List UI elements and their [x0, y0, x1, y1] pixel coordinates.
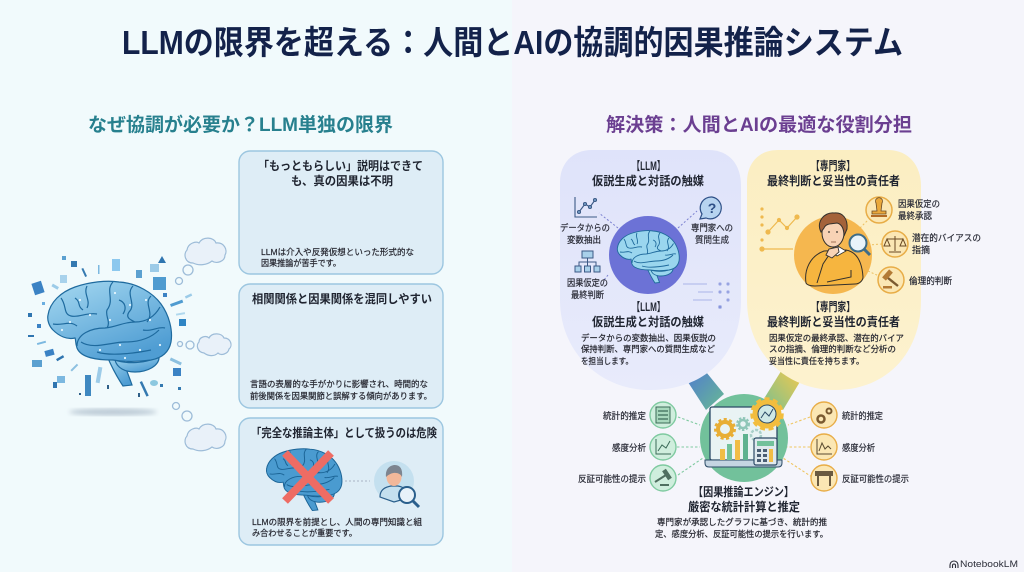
- card: correlation vs causation: [239, 284, 443, 408]
- laptop: [705, 407, 782, 467]
- icon: chart green: [650, 434, 676, 460]
- subheading line 2: 仮説生成と対話の触媒: [592, 315, 704, 329]
- icon: barrier yellow: [811, 465, 837, 491]
- label: sensitivity right: 感度分析: [842, 442, 875, 453]
- label: sensitivity left: 感度分析: [612, 442, 646, 453]
- connector dashes: [860, 220, 882, 276]
- label: falsifiability left: 反証可能性の提示: [578, 473, 646, 484]
- card body line 2: 因果推論が苦手です。: [261, 257, 341, 268]
- label: latent bias: 潜在的バイアスの: [912, 232, 981, 243]
- engine illustration: [700, 394, 788, 482]
- icon: calculator green: [650, 402, 676, 428]
- label: final approval: 因果仮定の: [898, 198, 940, 209]
- calculator: [754, 438, 777, 465]
- subheading: 【専門家】: [811, 300, 855, 314]
- dashed connectors: engine left: [677, 417, 703, 475]
- icon: person with magnifier: [374, 461, 419, 507]
- label: expert questions: 専門家への: [691, 222, 733, 233]
- card: dangerous as complete agent: [239, 418, 443, 545]
- icon: brain in circle: [609, 216, 687, 294]
- engine heading: 【因果推論エンジン】: [693, 485, 794, 499]
- thought clouds: [172, 238, 231, 451]
- decorative chart: [760, 208, 799, 251]
- thought bubbles: [172, 265, 194, 421]
- icon: expert person: [794, 213, 872, 294]
- data fragments: [28, 256, 192, 397]
- icon: scales: [882, 231, 908, 257]
- label line 2: 指摘: [912, 244, 930, 255]
- panel heading line 2: 仮説生成と対話の触媒: [592, 174, 704, 188]
- label line 2: 変数抽出: [567, 234, 601, 245]
- dotted arrows: [599, 211, 697, 280]
- card title: 相関関係と因果関係を混同しやすい: [252, 292, 432, 306]
- label: falsifiability right: 反証可能性の提示: [842, 473, 909, 484]
- icon: crossed brain: [266, 449, 342, 511]
- body line 2: スの指摘、倫理的判断など分析の: [769, 343, 896, 354]
- body: 因果仮定の最終承認、潜在的バイア: [769, 332, 904, 343]
- dashed connectors: engine right: [783, 417, 812, 477]
- card body: LLMの限界を前提とし、人間の専門知識と組: [252, 516, 422, 527]
- heading: right column: 解決策：人間とAIの最適な役割分担: [606, 113, 912, 136]
- engine body: 専門家が承認したグラフに基づき、統計的推: [657, 516, 827, 527]
- body line 3: 妥当性に責任を持ちます。: [769, 355, 864, 366]
- connector band: expert to engine: [765, 368, 801, 410]
- label line 2: 最終承認: [898, 210, 932, 221]
- dashed connector: [345, 480, 370, 482]
- cloud 1: [185, 238, 226, 265]
- body line 2: 保持判断、専門家への質問生成など: [581, 343, 715, 354]
- label line 2: 質問生成: [695, 234, 729, 245]
- card body: 言語の表層的な手がかりに影響され、時間的な: [250, 378, 428, 389]
- label: variable extraction: データからの: [560, 222, 610, 233]
- logo: NotebookLM: NotebookLM: [960, 559, 1018, 570]
- panel: LLM: [560, 150, 741, 390]
- connector band: LLM to engine: [686, 367, 724, 410]
- large gear: [752, 399, 782, 429]
- label: ethical judgement: 倫理的判断: [909, 275, 952, 286]
- brain: [48, 281, 172, 386]
- illustration: brain with fragments: [28, 256, 192, 416]
- decorative data lines: [683, 283, 729, 308]
- icon: gavel: [878, 267, 904, 293]
- background right: [512, 0, 1024, 572]
- gears: [716, 418, 761, 440]
- body line 3: を担当します。: [581, 355, 633, 366]
- label line 2: 最終判断: [571, 289, 604, 300]
- panel heading: 【LLM】: [632, 159, 665, 173]
- label: statistical estimation right: 統計的推定: [842, 410, 883, 421]
- cloud 3: [185, 424, 226, 451]
- body: データからの変数抽出、因果仮説の: [581, 332, 716, 343]
- card title: 「完全な推論主体」として扱うのは危険: [251, 426, 437, 440]
- card body line 2: 前後関係を因果関節と誤解する傾向があります。: [250, 390, 432, 401]
- brain shadow: [69, 408, 157, 416]
- subheading: 【LLM】: [632, 300, 665, 314]
- card title line 2: も、真の因果は不明: [291, 174, 393, 188]
- icon: question bubble: ?: [708, 200, 716, 216]
- card title: 「もっともらしい」説明はできて: [258, 159, 423, 173]
- panel heading line 2: 最終判断と妥当性の責任者: [767, 174, 900, 188]
- icon: gears yellow: [811, 402, 837, 428]
- card: plausible explanation: [239, 151, 443, 274]
- brain nodes: [61, 292, 161, 359]
- icon: hierarchy: [575, 251, 600, 272]
- icon: question bubble: [700, 197, 721, 219]
- title: LLMの限界を超える：人間とAIの協調的因果推論システム: [122, 24, 903, 61]
- engine body line 2: 定、感度分析、反証可能性の提示を行います。: [655, 528, 828, 539]
- card body: LLMは介入や反発仮想といった形式的な: [261, 246, 414, 257]
- icon: magnifier: [850, 234, 870, 255]
- label: statistical estimation left: 統計的推定: [603, 410, 646, 421]
- label: causal hypothesis: 因果仮定の: [567, 277, 608, 288]
- heading: left column: なぜ協調が必要か？LLM単独の限界: [88, 113, 393, 136]
- card body line 2: み合わせることが重要です。: [252, 527, 357, 538]
- panel: expert: [747, 150, 921, 390]
- icon: sensitivity chart yellow: [811, 434, 837, 460]
- cloud 2: [197, 334, 231, 356]
- icon: gavel green: [650, 465, 676, 491]
- engine circle: [700, 394, 788, 482]
- panel heading: 【専門家】: [811, 159, 855, 173]
- background left: [0, 0, 512, 572]
- engine heading line 2: 厳密な統計計算と推定: [688, 500, 800, 514]
- subheading line 2: 最終判断と妥当性の責任者: [767, 315, 900, 329]
- icon: line chart: [575, 197, 597, 217]
- icon: stamp: [866, 197, 892, 223]
